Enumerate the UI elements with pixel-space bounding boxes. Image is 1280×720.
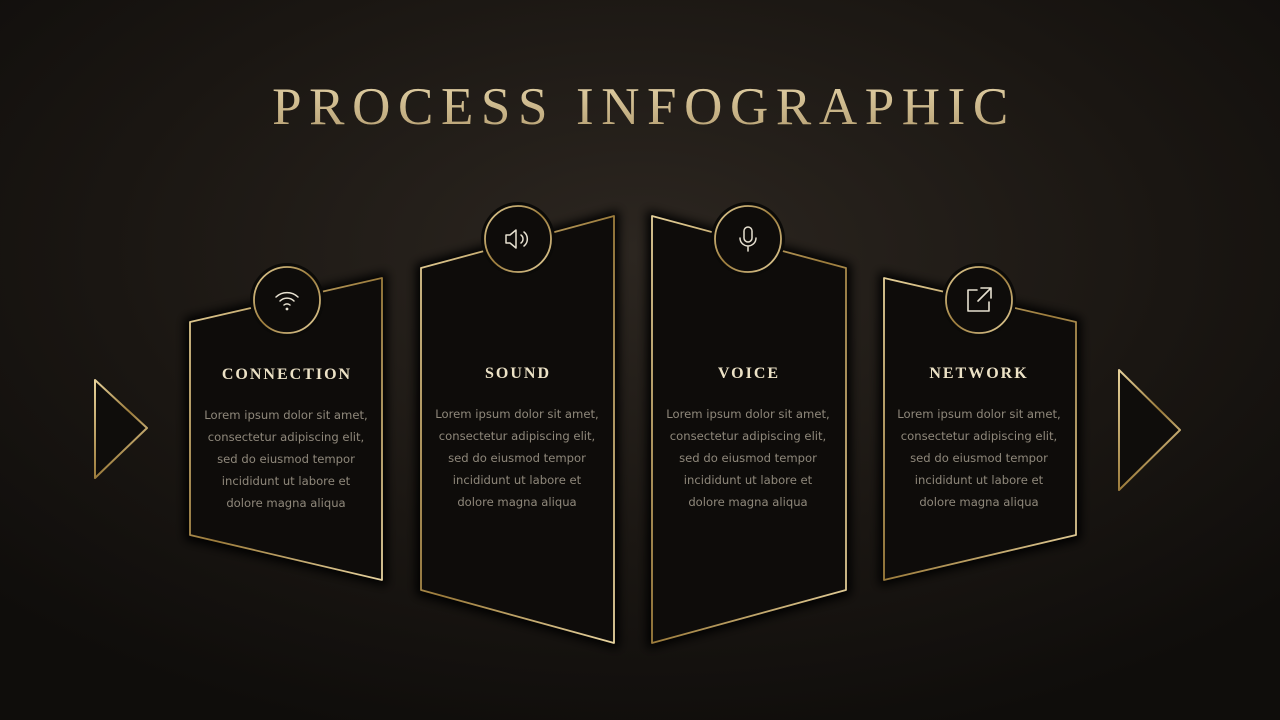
panel: sound <box>416 202 619 649</box>
text block: incididunt ut labore et <box>453 473 582 487</box>
text block: incididunt ut labore et <box>915 473 1044 487</box>
text block: consectetur adipiscing elit, <box>439 429 595 443</box>
title: PROCESS INFOGRAPHIC <box>272 78 1016 136</box>
icon: wifi <box>250 263 324 337</box>
text block: Lorem ipsum dolor sit amet, <box>435 407 599 421</box>
panel: connection <box>185 263 387 586</box>
text block: Lorem ipsum dolor sit amet, <box>204 408 368 422</box>
panel: network <box>879 263 1081 586</box>
text block: sed do eiusmod tempor <box>679 451 817 465</box>
text block: sed do eiusmod tempor <box>448 451 586 465</box>
text block: Lorem ipsum dolor sit amet, <box>897 407 1061 421</box>
icon: external link <box>942 263 1016 337</box>
text block: dolore magna aliqua <box>919 495 1039 509</box>
text block: incididunt ut labore et <box>222 474 351 488</box>
heading: CONNECTION <box>222 366 352 383</box>
arrow: left <box>95 380 147 478</box>
text block: dolore magna aliqua <box>457 495 577 509</box>
heading: NETWORK <box>929 365 1029 382</box>
text block: consectetur adipiscing elit, <box>208 430 364 444</box>
panel: voice <box>647 202 851 649</box>
heading: SOUND <box>485 365 551 382</box>
icon: speaker <box>481 202 555 276</box>
arrow: right <box>1119 370 1180 490</box>
text block: sed do eiusmod tempor <box>910 451 1048 465</box>
heading: VOICE <box>718 365 780 382</box>
text block: consectetur adipiscing elit, <box>901 429 1057 443</box>
text block: dolore magna aliqua <box>688 495 808 509</box>
icon: microphone <box>711 202 785 276</box>
text block: sed do eiusmod tempor <box>217 452 355 466</box>
text block: incididunt ut labore et <box>684 473 813 487</box>
text block: consectetur adipiscing elit, <box>670 429 826 443</box>
text block: Lorem ipsum dolor sit amet, <box>666 407 830 421</box>
text block: dolore magna aliqua <box>226 496 346 510</box>
